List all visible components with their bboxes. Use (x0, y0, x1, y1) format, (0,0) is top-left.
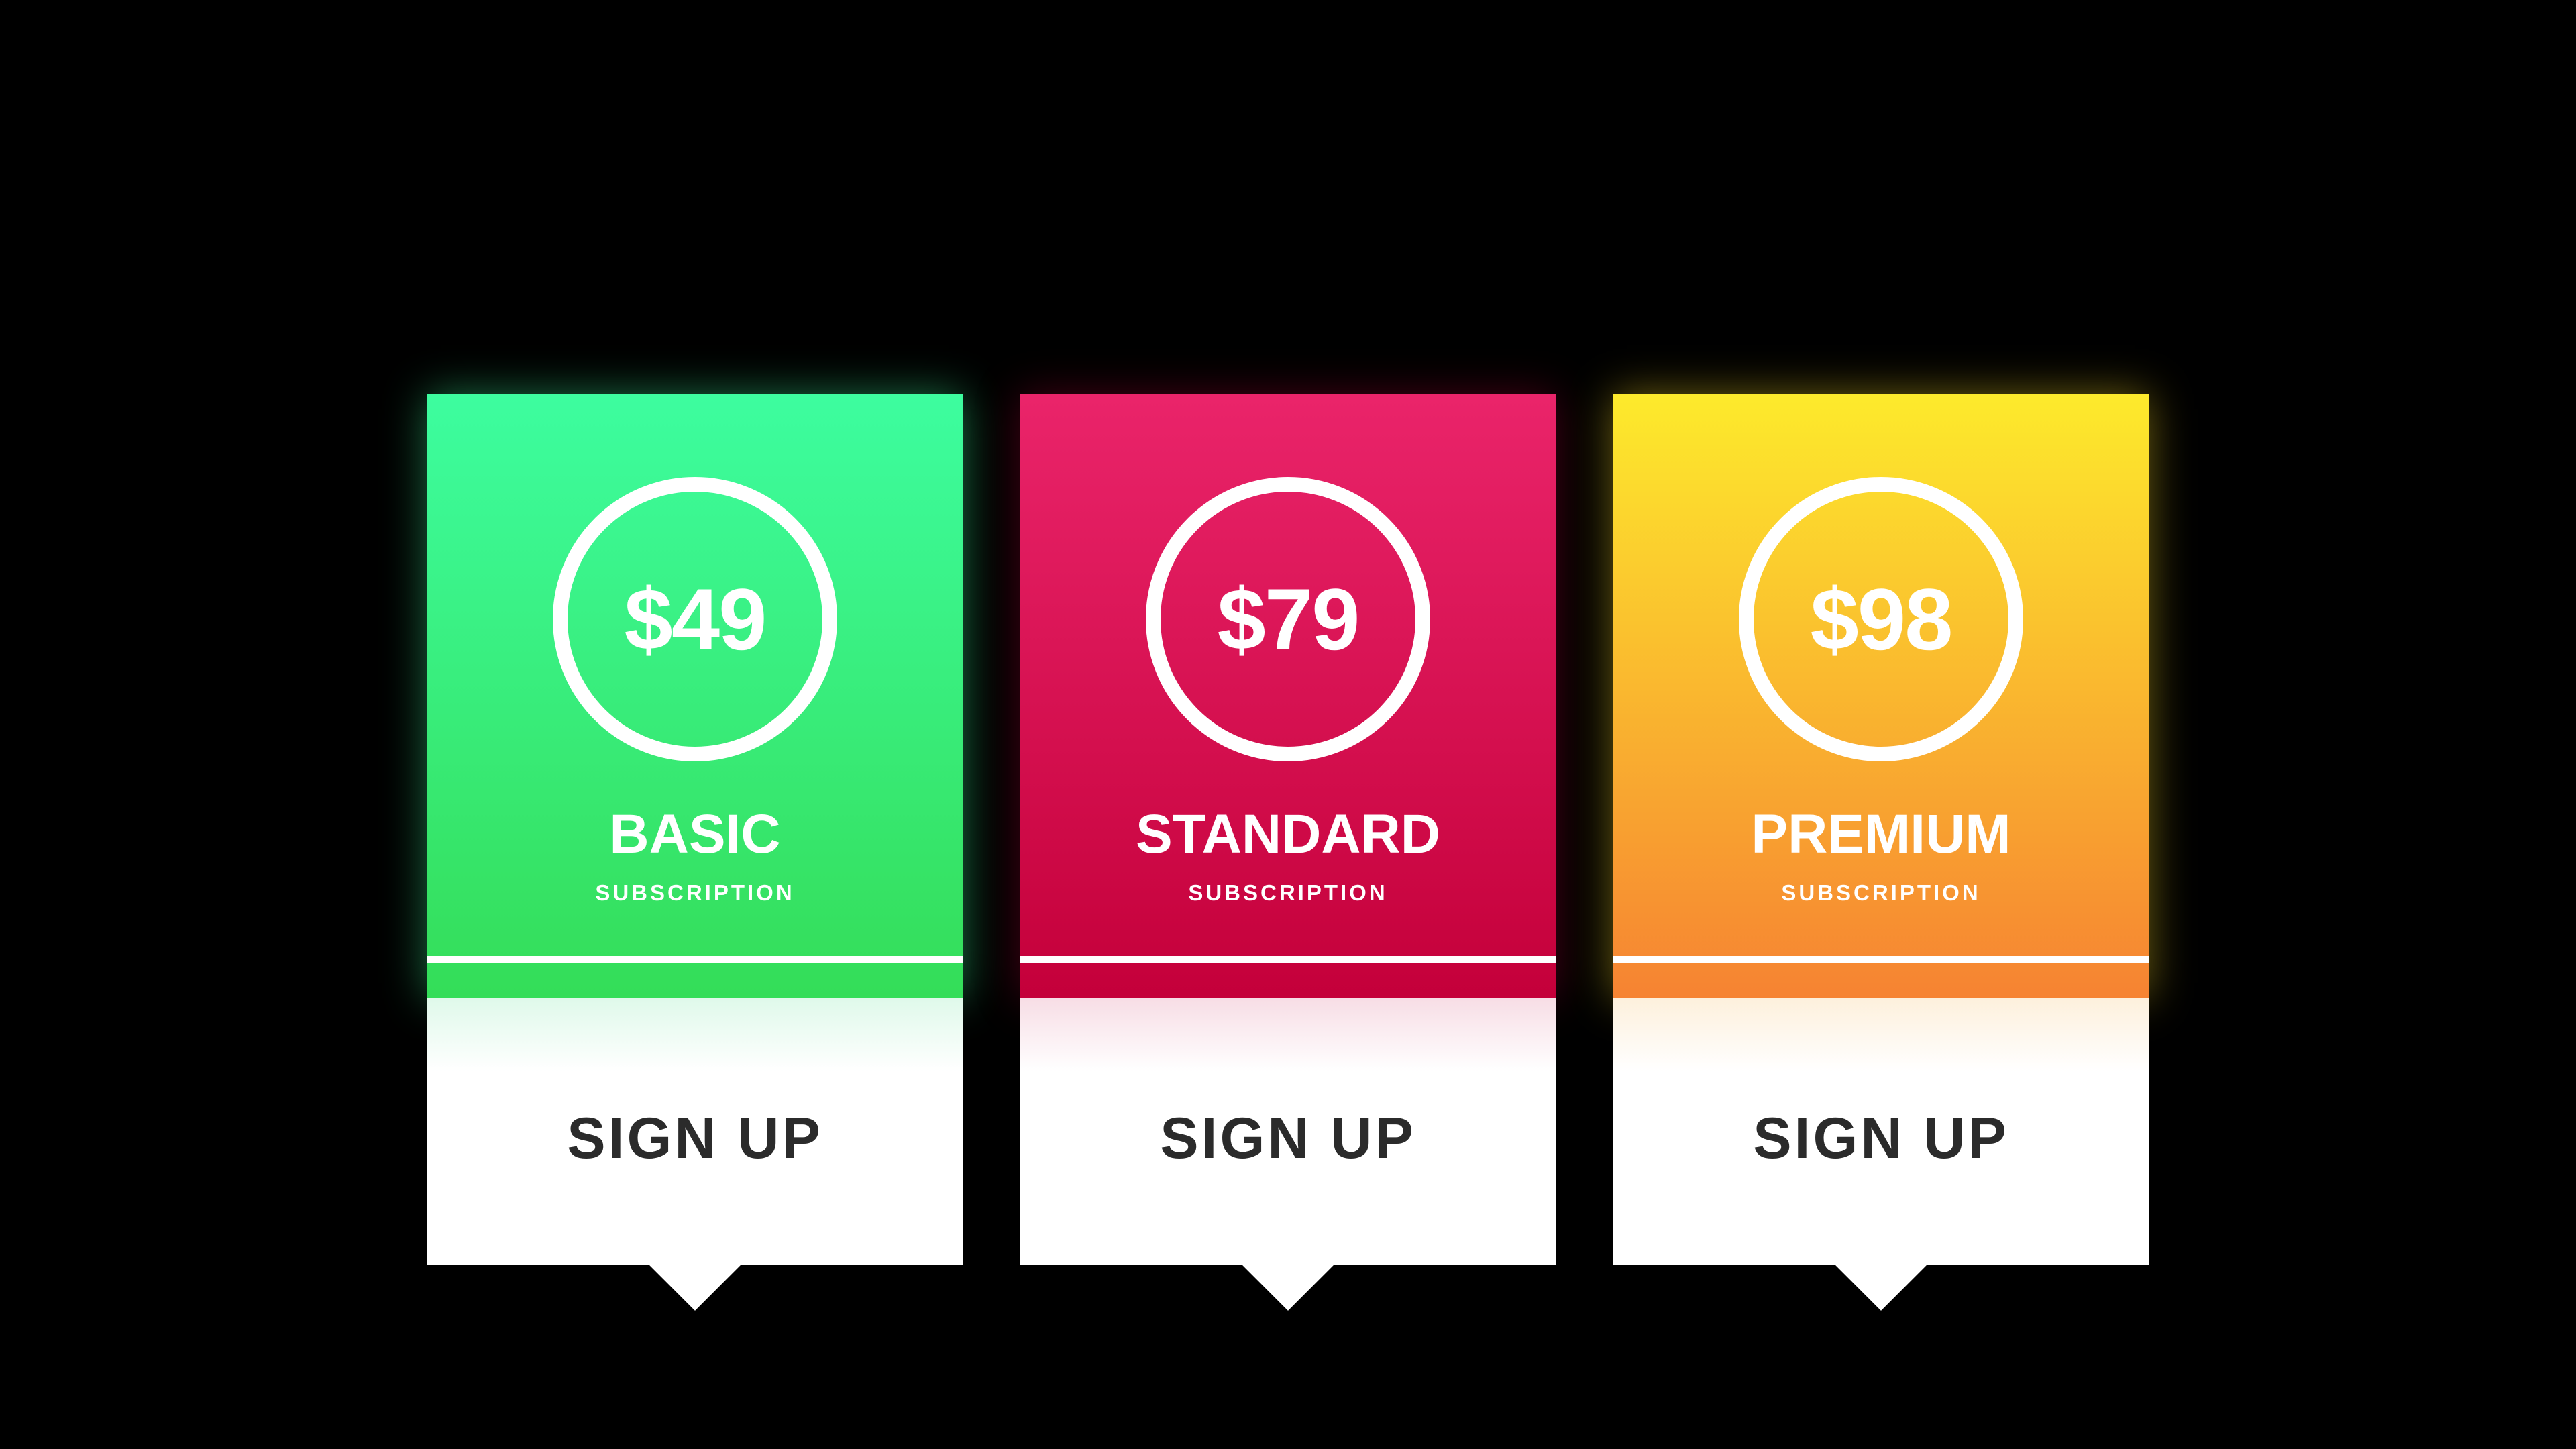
card: standard (998, 370, 1578, 1311)
plan name: STANDARD (1136, 804, 1440, 865)
price circle: $98 (1811, 570, 1951, 668)
button text: SIGN UP (1160, 1106, 1416, 1171)
price circle: $49 (625, 570, 765, 668)
notch (1835, 1220, 1927, 1311)
subtitle: SUBSCRIPTION (1188, 880, 1388, 905)
plan name: PREMIUM (1751, 804, 2011, 865)
subtitle: SUBSCRIPTION (1781, 880, 1981, 905)
notch (649, 1220, 741, 1311)
button text: SIGN UP (1753, 1106, 2009, 1171)
card: premium (1585, 365, 2178, 1311)
card: basic (398, 365, 991, 1311)
colored header (427, 394, 963, 998)
signup area (427, 998, 963, 1265)
price circle (553, 477, 837, 761)
button text: SIGN UP (567, 1106, 823, 1171)
price circle (1739, 477, 2023, 761)
subtitle: SUBSCRIPTION (595, 880, 795, 905)
signup area (1613, 998, 2149, 1265)
notch (1242, 1220, 1334, 1311)
signup area (1020, 998, 1556, 1265)
price circle (1146, 477, 1430, 761)
colored header (1020, 394, 1556, 998)
plan name: BASIC (609, 804, 781, 865)
price circle: $79 (1218, 570, 1358, 668)
colored header (1613, 394, 2149, 998)
